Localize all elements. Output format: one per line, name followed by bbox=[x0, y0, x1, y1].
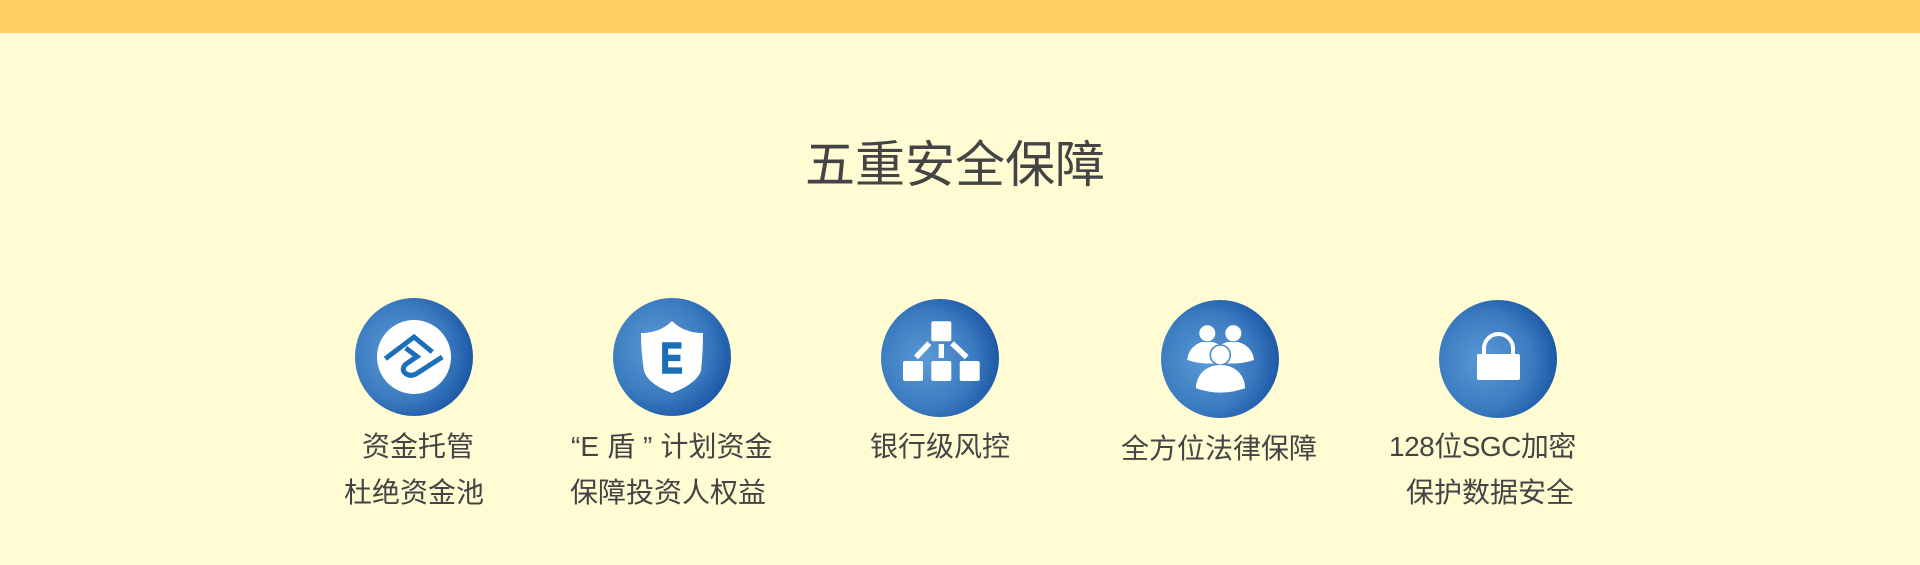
text: SGC line 2: 保护数据安全 bbox=[1406, 477, 1574, 508]
icon: people bbox=[1161, 300, 1279, 418]
text: fund custody line 1: 资金托管 bbox=[362, 431, 474, 462]
top banner bbox=[0, 0, 1920, 33]
icon: E shield bbox=[613, 298, 731, 416]
panel: 128-bit SGC encryption bbox=[1389, 300, 1576, 508]
icon: custody logo bbox=[355, 298, 473, 416]
text: SGC line 1: 128位SGC加密 bbox=[1389, 431, 1576, 462]
panel: E shield bbox=[570, 298, 773, 508]
text: E shield line 1: “E 盾 ” 计划资金 bbox=[571, 431, 773, 462]
icon: padlock bbox=[1439, 300, 1557, 418]
text: fund custody line 2: 杜绝资金池 bbox=[344, 477, 484, 508]
panel: fund custody bbox=[344, 298, 484, 508]
text: E shield line 2: 保障投资人权益 bbox=[570, 477, 766, 508]
panel: legal protection bbox=[1121, 300, 1317, 464]
title: 五重安全保障 bbox=[805, 137, 1105, 193]
text: legal protection: 全方位法律保障 bbox=[1121, 433, 1317, 464]
icon: E shield: E bbox=[660, 335, 683, 383]
text: bank-grade risk control: 银行级风控 bbox=[870, 431, 1010, 462]
panel: bank-grade risk control bbox=[870, 299, 1010, 462]
icon: hierarchy bbox=[881, 299, 999, 417]
